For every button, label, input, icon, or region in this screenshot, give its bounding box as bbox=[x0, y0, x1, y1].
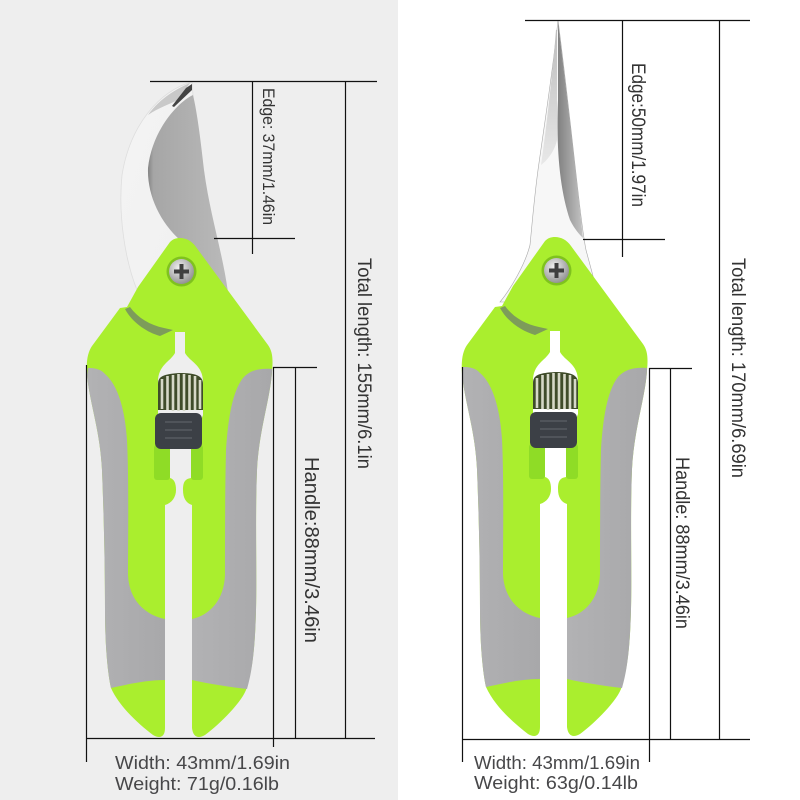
label: left weight: Weight: 71g/0.16lb bbox=[115, 774, 279, 794]
left dimension lines bbox=[86, 81, 377, 762]
label: right width: Width: 43mm/1.69in bbox=[474, 753, 640, 773]
blade right shading bbox=[558, 22, 583, 238]
right pruner bbox=[462, 20, 648, 744]
right dimension lines bbox=[462, 20, 750, 762]
outer curved blade bbox=[121, 82, 195, 290]
pivot screw bbox=[166, 256, 196, 286]
label: right total length: Total length: 170mm/6.69in bbox=[727, 258, 748, 478]
label: right edge: Edge:50mm/1.97in bbox=[627, 63, 648, 207]
blade tip edge bbox=[172, 84, 192, 107]
label: left total length: Total length: 155mm/6.1in bbox=[353, 258, 374, 469]
spring bbox=[158, 373, 203, 411]
black lock slider bbox=[155, 413, 202, 449]
label: left edge: Edge: 37mm/1.46in bbox=[259, 88, 278, 225]
left pruner bbox=[87, 82, 273, 745]
pointed blade bbox=[500, 20, 600, 302]
label: left width: Width: 43mm/1.69in bbox=[115, 753, 290, 773]
green body bbox=[462, 237, 648, 744]
label: left handle: Handle:88mm/3.46in bbox=[300, 457, 322, 643]
label: right handle: Handle: 88mm/3.46in bbox=[671, 457, 692, 629]
inner hook blade bbox=[148, 95, 228, 292]
joint seam bbox=[125, 307, 173, 336]
panel: left background bbox=[0, 0, 398, 800]
blade spine shading bbox=[148, 83, 190, 115]
grey right grip bbox=[192, 369, 272, 689]
blade left shading bbox=[541, 30, 557, 165]
grey left grip bbox=[87, 368, 165, 688]
label: right weight: Weight: 63g/0.14lb bbox=[474, 773, 638, 793]
panel: right background bbox=[398, 0, 800, 800]
lower tabs bbox=[154, 445, 203, 480]
green body bbox=[87, 238, 273, 737]
spring window and handle gap bbox=[158, 332, 203, 745]
